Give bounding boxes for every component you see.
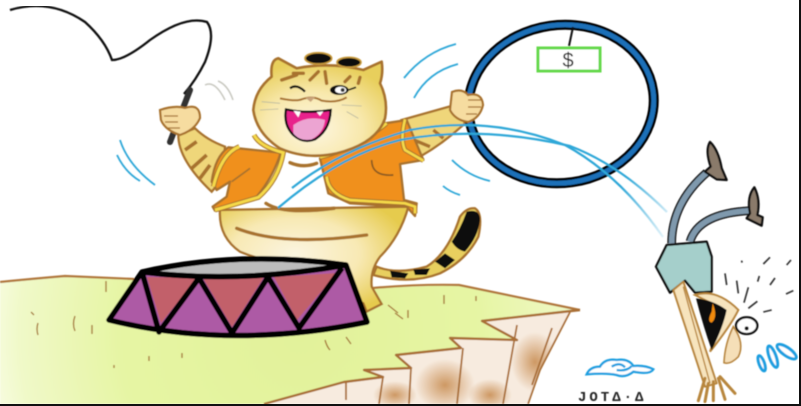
cat mouth (285, 109, 331, 141)
head and open mouth (695, 293, 757, 363)
shock marks (725, 257, 793, 312)
motion lines (117, 44, 490, 195)
right arm (402, 105, 465, 157)
legs (672, 173, 750, 243)
falling man (587, 142, 798, 402)
whip (10, 6, 211, 94)
hoop: blue ring with money sign (458, 13, 664, 195)
dollar bill (538, 48, 600, 72)
left hand with whip handle (160, 90, 200, 142)
ground: green cliff top (0, 276, 580, 404)
arms (673, 282, 735, 402)
cat: tail, body, vest, arms and head (178, 53, 480, 312)
cat head (253, 53, 386, 156)
cat tail (373, 208, 480, 280)
sunglasses (305, 53, 361, 67)
right vest (320, 119, 423, 216)
shirt (656, 242, 712, 293)
blue swoosh lines (278, 125, 667, 237)
shoes (705, 142, 763, 226)
circus drum (109, 259, 367, 336)
cloud (587, 360, 653, 376)
belly stripes (237, 163, 367, 240)
cat body (220, 207, 408, 312)
sweat drops (756, 342, 798, 372)
left vest (212, 135, 283, 211)
man's eye (736, 317, 757, 334)
dollar bill: $ (562, 50, 574, 72)
right hand on hoop (450, 91, 483, 122)
cat eyes (290, 85, 356, 95)
cliff: rock face (264, 310, 580, 406)
left arm (178, 128, 225, 192)
signature: JOTΔ·Δ (578, 390, 646, 406)
